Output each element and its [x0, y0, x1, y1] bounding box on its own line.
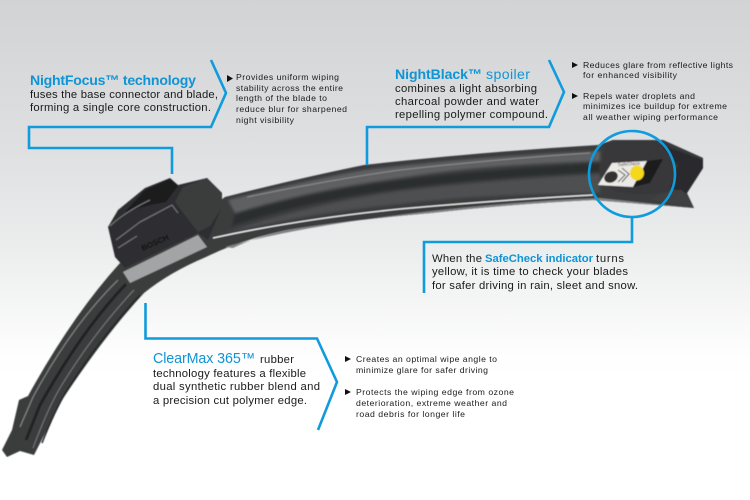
heading: NightBlack spoiler [395, 66, 530, 82]
heading: ClearMax 365 rubber: rubber [260, 354, 294, 366]
SafeCheck label [598, 159, 663, 187]
connector line: NightBlack [367, 60, 564, 165]
spoiler top highlight [247, 153, 590, 197]
bullet: reduces glare: Reduces glare from reflective lights [583, 60, 734, 70]
connector top facet [175, 178, 222, 232]
bullet: repels water [572, 91, 727, 122]
description: SafeCheck: turns [596, 253, 624, 265]
description: NightFocus [30, 89, 218, 114]
SafeCheck label: SafeCheck [618, 161, 641, 167]
spoiler lower band [222, 174, 600, 234]
description: SafeCheck: SafeCheck indicator [485, 253, 594, 265]
wiper blade [2, 140, 703, 457]
rubber strip [225, 198, 694, 248]
description: SafeCheck [432, 253, 638, 292]
bullet: optimal wipe angle [345, 354, 497, 375]
bullet: uniform wiping stability: Provides uniform wiping [236, 72, 339, 82]
connector body [108, 178, 222, 268]
connector dark recess [125, 179, 178, 212]
blade silhouette [2, 140, 703, 457]
description: SafeCheck: for safer driving in rain, sleet and snow. [432, 280, 638, 292]
heading: NightBlack spoiler: NightBlack™ [395, 66, 482, 82]
description: NightBlack: combines a light absorbing [395, 83, 537, 95]
bullet: protects wiping edge [345, 387, 514, 419]
spoiler bands [222, 151, 600, 234]
callout: SafeCheck [424, 131, 675, 293]
callout: NightFocus [29, 60, 347, 174]
description: SafeCheck: yellow, it is time to check your blades [432, 266, 628, 278]
connector silver insert [123, 235, 207, 283]
bullet: protects wiping edge: deterioration, extreme weather and [356, 398, 507, 408]
bullet: optimal wipe angle: minimize glare for safer driving [356, 365, 488, 375]
description: NightFocus: forming a single core construction. [30, 102, 211, 114]
description: ClearMax [153, 368, 320, 407]
callout: NightBlack [367, 60, 734, 165]
description: ClearMax: a precision cut polymer edge. [153, 395, 307, 407]
left arm highlights [20, 280, 118, 427]
heading: NightFocus technology: NightFocus™ technology [30, 72, 196, 88]
bullet: uniform wiping stability [227, 72, 347, 125]
connector line: NightFocus [29, 60, 226, 174]
bullet: reduces glare: for enhanced visibility [583, 70, 678, 80]
bullet: repels water: minimizes ice buildup for extreme [583, 101, 727, 111]
heading: NightBlack spoiler: spoiler [486, 66, 530, 82]
bullet: reduces glare [572, 60, 734, 80]
description: NightBlack [395, 83, 548, 121]
bullet: uniform wiping stability: length of the blade to [236, 93, 327, 103]
heading: ClearMax 365 rubber: ClearMax 365™ [153, 351, 255, 367]
spoiler dark shadow band [232, 163, 600, 226]
magnifier circle [589, 131, 675, 217]
bullet: protects wiping edge: road debris for longer life [356, 409, 465, 419]
description: SafeCheck: When the [432, 253, 482, 265]
connector line: SafeCheck [424, 217, 632, 293]
bullet: protects wiping edge: Protects the wiping edge from ozone [356, 387, 514, 397]
description: ClearMax: technology features a flexible [153, 368, 306, 380]
bullet: repels water: Repels water droplets and [583, 91, 695, 101]
connector brand: BOSCH [140, 233, 170, 253]
bullet: uniform wiping stability: reduce blur for sharpened [236, 104, 347, 114]
spoiler upper band [228, 151, 600, 213]
description: NightBlack: charcoal powder and water [395, 96, 539, 108]
bullet: uniform wiping stability: night visibility [236, 115, 295, 125]
bullet: uniform wiping stability: stability across the entire [236, 83, 343, 93]
description: NightFocus: fuses the base connector and blade, [30, 89, 218, 101]
tip end cap [600, 140, 703, 194]
description: NightBlack: repelling polymer compound. [395, 109, 548, 121]
blade edge highlight [213, 195, 593, 238]
bullet: repels water: all weather wiping performance [583, 112, 718, 122]
description: ClearMax: dual synthetic rubber blend and [153, 381, 320, 393]
bullet: optimal wipe angle: Creates an optimal wipe angle to [356, 354, 497, 364]
callout: ClearMax [146, 303, 514, 430]
connector line: ClearMax [146, 303, 337, 430]
